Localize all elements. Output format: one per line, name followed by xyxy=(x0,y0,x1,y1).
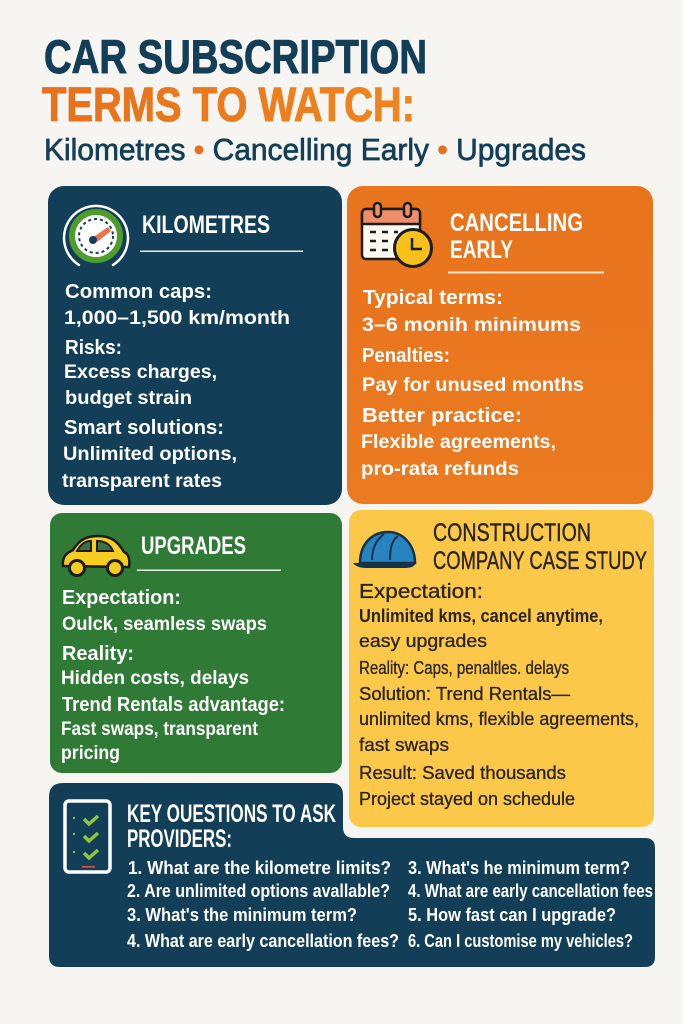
kilometres text: Common caps: xyxy=(65,281,212,303)
upgrades text: Oulck, seamless swaps xyxy=(62,614,267,635)
questions right column: 6. Can I customise my vehicles? xyxy=(408,931,633,951)
icon: yellow car xyxy=(63,536,129,576)
kilometres background xyxy=(48,186,342,505)
case study text: Expectation: xyxy=(359,581,483,603)
title line 2: TERMS TO WATCH: xyxy=(42,79,415,132)
questions left column: 3. What's the minimum term? xyxy=(127,905,357,925)
icon: calendar with clock xyxy=(362,203,432,266)
questions left column: 4. What are early cancellation fees? xyxy=(127,931,399,951)
upgrades heading: UPGRADES xyxy=(141,532,246,560)
key questions background xyxy=(49,783,655,967)
upgrades text xyxy=(61,587,285,764)
cancelling early text: Penalties: xyxy=(362,345,450,367)
kilometres text: transparent rates xyxy=(62,471,222,492)
subtitle: Kilometres • Cancelling Early • Upgrades xyxy=(44,132,586,167)
title line 1: CAR SUBSCRIPTION xyxy=(44,30,427,83)
icon: checklist tablet xyxy=(65,801,110,872)
questions right column xyxy=(408,858,653,951)
cancelling early text xyxy=(361,287,584,480)
icon: speedometer gauge xyxy=(64,206,128,265)
panel: cancelling early xyxy=(347,186,653,504)
key questions heading xyxy=(127,800,336,853)
cancelling early text: Pay for unused months xyxy=(362,375,584,396)
case study heading: CONSTRUCTION xyxy=(433,519,591,547)
case study text: easy upgrades xyxy=(359,631,487,651)
case study text: Result: Saved thousands xyxy=(359,763,566,783)
questions left column xyxy=(127,858,399,951)
upgrades background xyxy=(50,513,342,773)
cancelling early text: pro-rata refunds xyxy=(361,459,519,480)
kilometres text: Excess charges, xyxy=(64,362,217,383)
upgrades text: Hidden costs, delays xyxy=(61,668,249,689)
case study background xyxy=(349,510,654,827)
questions right column: 3. What's he minimum term? xyxy=(408,858,630,878)
panel: key questions xyxy=(49,783,655,967)
upgrades text: pricing xyxy=(61,743,120,764)
case study text: Unlimited kms, cancel anytime, xyxy=(359,606,603,626)
upgrades text: Reality: xyxy=(62,643,134,665)
cancelling early heading: EARLY xyxy=(450,236,513,264)
kilometres heading: KILOMETRES xyxy=(142,211,270,239)
icon: blue hard hat xyxy=(353,532,415,568)
kilometres text: 1,000–1,500 km/month xyxy=(64,308,290,329)
upgrades text: Expectation: xyxy=(62,587,181,609)
case study heading xyxy=(433,519,647,575)
key questions heading: PROVIDERS: xyxy=(127,825,232,853)
questions left column: 2. Are unlimited options avallable? xyxy=(127,881,390,901)
cancelling early text: Typical terms: xyxy=(363,287,503,309)
case study text: fast swaps xyxy=(359,735,449,755)
cancelling early text: Flexible agreements, xyxy=(361,432,556,453)
cancelling early text: 3–6 monih minimums xyxy=(362,315,581,336)
title block xyxy=(42,30,586,167)
panel: construction company case study xyxy=(349,510,654,827)
questions right column: 5. How fast can I upgrade? xyxy=(408,905,616,925)
cancelling early heading xyxy=(450,209,583,264)
key questions heading: KEY OUESTIONS TO ASK xyxy=(127,800,336,828)
kilometres text: Unlimited options, xyxy=(63,444,237,465)
case study text: Solution: Trend Rentals— xyxy=(359,684,570,704)
cancelling early background xyxy=(347,186,653,504)
case study text: Reality: Caps, penaltles. delays xyxy=(359,658,569,678)
upgrades text: Trend Rentals advantage: xyxy=(62,694,285,716)
kilometres text: budget strain xyxy=(65,388,192,409)
case study text xyxy=(359,581,639,809)
case study text: unlimited kms, flexible agreements, xyxy=(359,709,639,729)
cancelling early text: Better practice: xyxy=(362,405,522,427)
kilometres text: Smart solutions: xyxy=(64,417,224,439)
kilometres text xyxy=(62,281,290,492)
panel: kilometres xyxy=(48,186,342,505)
cancelling early heading: CANCELLING xyxy=(450,209,583,237)
case study text: Project stayed on schedule xyxy=(359,789,575,809)
panel: upgrades xyxy=(50,513,342,773)
kilometres text: Risks: xyxy=(65,337,122,359)
questions left column: 1. What are the kilometre limits? xyxy=(128,858,391,878)
upgrades text: Fast swaps, transparent xyxy=(61,719,259,740)
